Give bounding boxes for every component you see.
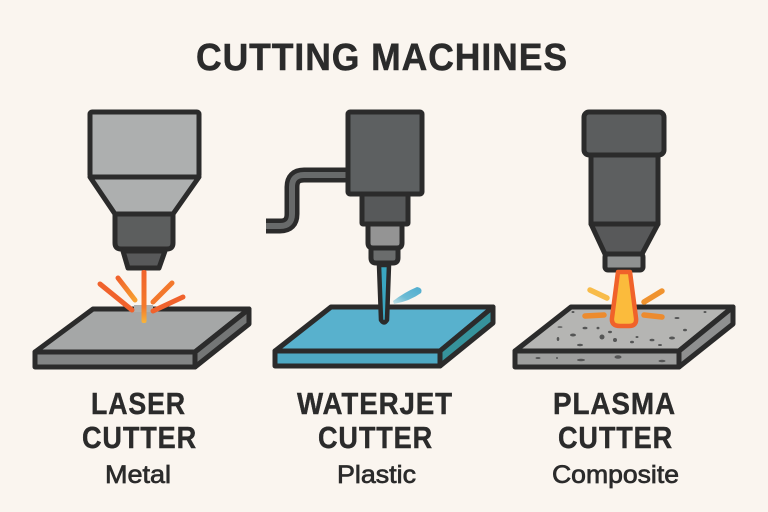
label: waterjet cutter (297, 386, 453, 489)
waterjet collar (362, 194, 408, 224)
laser funnel (90, 177, 199, 214)
plasma top cap (584, 112, 664, 155)
plasma body (591, 155, 658, 224)
label: waterjet cutter: Plastic (337, 461, 416, 489)
label: laser cutter: CUTTER (82, 420, 197, 455)
label: plasma cutter: CUTTER (558, 420, 673, 455)
label: plasma cutter (552, 386, 679, 489)
label: plasma cutter: Composite (552, 461, 679, 489)
panel: waterjet cutter (266, 112, 493, 366)
label: laser cutter (82, 386, 197, 489)
label: laser cutter: Metal (105, 461, 171, 489)
plasma flame (612, 272, 636, 326)
composite plate (515, 307, 733, 367)
water spray (393, 287, 422, 304)
panel: laser cutter (35, 112, 249, 367)
plastic plate (275, 307, 493, 366)
metal plate (35, 309, 249, 367)
composite speckles (536, 311, 706, 362)
plasma illustration (515, 112, 733, 367)
waterjet housing (348, 112, 422, 194)
laser cutter illustration (35, 112, 249, 367)
label: laser cutter: LASER (91, 386, 186, 421)
label: plasma cutter: PLASMA (553, 386, 676, 421)
waterjet illustration (275, 112, 493, 366)
waterjet nozzle (371, 248, 398, 263)
plasma funnel (591, 224, 658, 254)
plasma nozzle (605, 254, 643, 270)
label: waterjet cutter: WATERJET (297, 386, 453, 421)
laser nozzle body (115, 214, 173, 249)
waterjet coupling (368, 224, 402, 248)
water supply pipe (266, 175, 350, 226)
panel: plasma cutter (515, 112, 733, 367)
laser nozzle tip (123, 251, 165, 268)
label: waterjet cutter: CUTTER (318, 420, 433, 455)
laser head housing (90, 112, 199, 177)
water needle (379, 265, 389, 322)
plasma sparks (585, 290, 662, 317)
title: CUTTING MACHINES (196, 37, 568, 79)
laser sparks (100, 278, 183, 311)
laser beam (134, 270, 153, 323)
